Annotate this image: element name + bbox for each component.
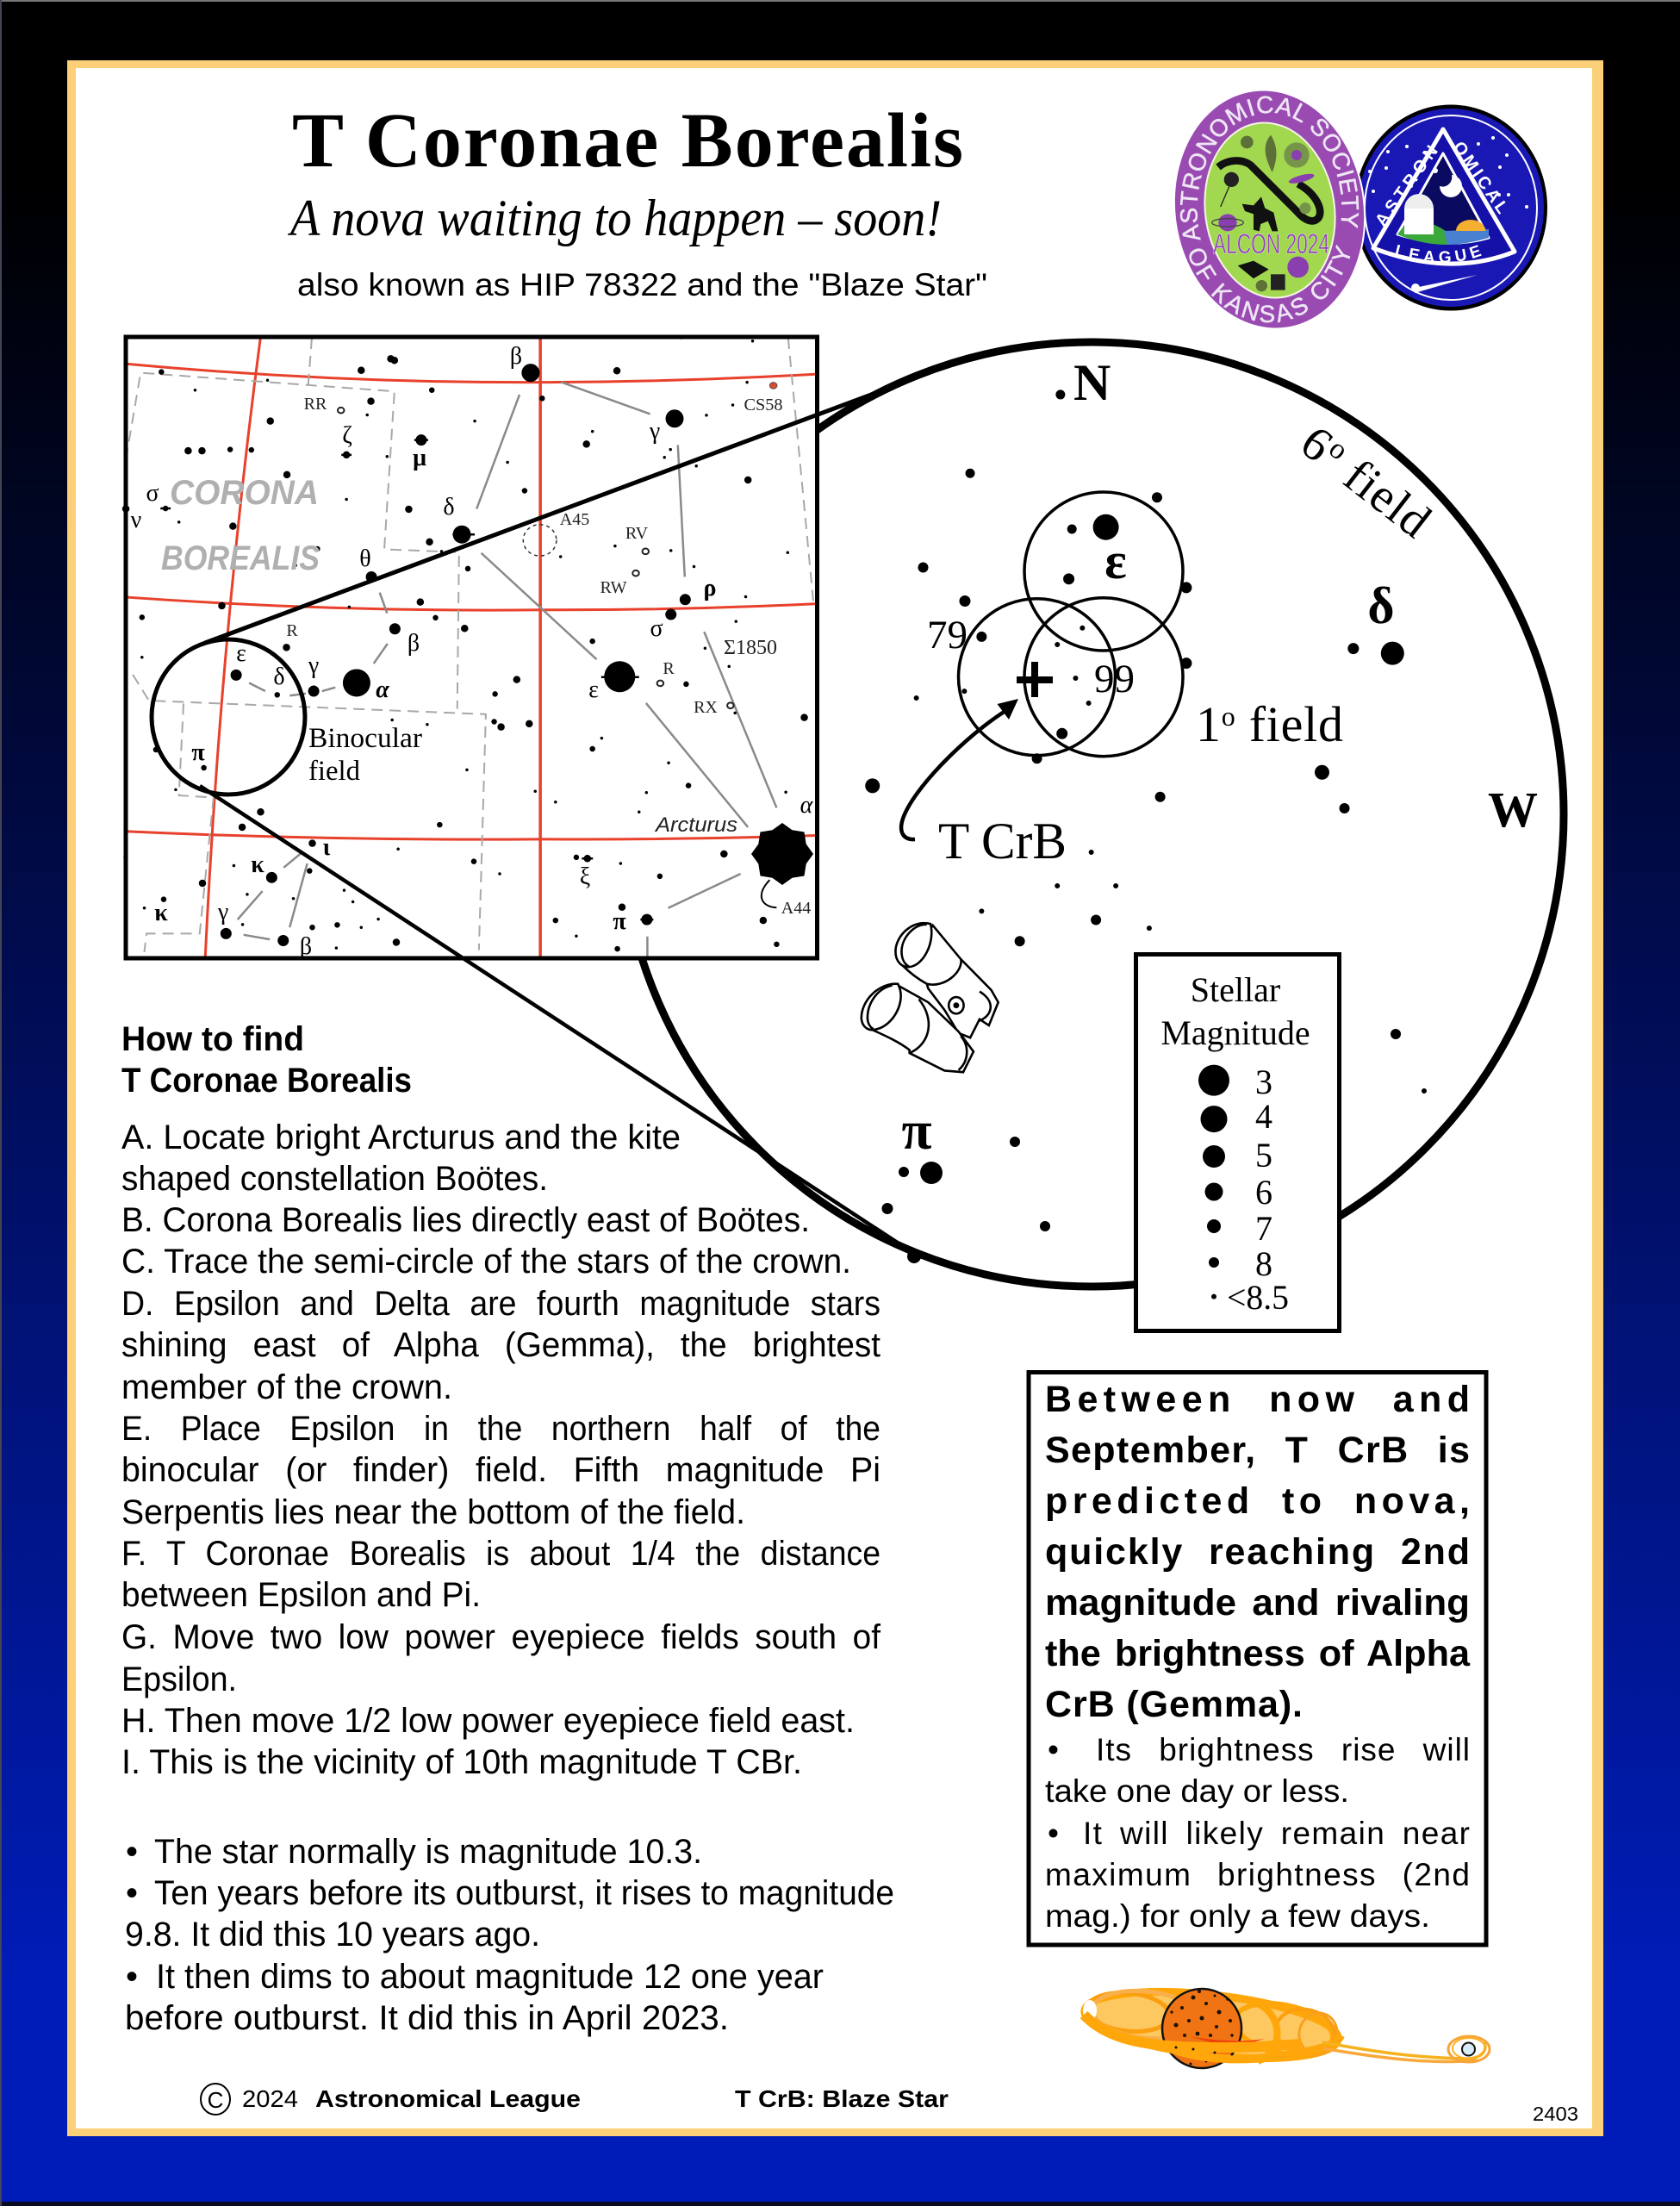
panel: stellar magnitude legend: Magnitude: [1160, 1013, 1310, 1052]
callout: prediction: predicted to nova,: [1045, 1480, 1470, 1522]
subtitle: A nova waiting to happen – soon!: [287, 190, 942, 246]
map labels: ν: [131, 507, 141, 533]
map labels: ρ: [704, 575, 716, 601]
logo: ALCON 2024: OF KANSAS CITY: [1189, 245, 1351, 322]
text block: finding instructions: B. Corona Borealis lies directly east of Boötes.: [121, 1201, 810, 1239]
field labels: T CrB: [938, 813, 1067, 869]
title: T Coronae Borealis: [292, 98, 963, 184]
logo: Astronomical League: OMICAL: [1456, 142, 1506, 215]
footer: copyright: Astronomical League: [315, 2085, 581, 2112]
field labels: W: [1488, 782, 1538, 838]
text block: finding instructions: member of the crown.: [121, 1368, 452, 1406]
constellation figures: [238, 382, 776, 957]
footer: issue number: 2403: [1533, 2103, 1578, 2125]
icon: binoculars: [862, 923, 999, 1072]
callout: prediction: maximum brightness (2nd: [1045, 1857, 1470, 1892]
map labels: RR: [304, 395, 327, 414]
logo: Astronomical League: [1360, 105, 1547, 310]
text block: brightness history: 9.8. It did this 10 years ago.: [125, 1916, 540, 1954]
callout: prediction: mag.) for only a few days.: [1045, 1898, 1430, 1934]
text block: finding instructions: E. Place Epsilon in the northern half of the: [121, 1410, 880, 1448]
text block: finding instructions: A. Locate bright Arcturus and the kite: [121, 1119, 681, 1156]
map labels: BOREALIS: [161, 539, 320, 577]
callout: prediction: magnitude and rivaling: [1045, 1582, 1470, 1623]
map labels: R: [286, 621, 298, 640]
panel: stellar magnitude legend: 8: [1255, 1244, 1272, 1283]
alternate names: also known as HIP 78322 and the "Blaze Star": [297, 267, 987, 302]
panel: stellar magnitude legend: Stellar: [1191, 970, 1280, 1009]
map labels: β: [408, 630, 420, 657]
map labels: A44: [781, 899, 811, 918]
footer: copyright: 2024: [242, 2085, 298, 2112]
field labels: δ: [1367, 577, 1395, 634]
field labels: 99: [1094, 657, 1135, 701]
panel: stellar magnitude legend: [1136, 955, 1339, 1330]
text block: finding instructions: [121, 1119, 881, 1781]
text block: brightness history: •: [126, 1833, 138, 1871]
field labels: ε: [1104, 533, 1127, 589]
map labels: CORONA: [170, 474, 319, 512]
one degree field circles: [958, 492, 1183, 757]
panel: stellar magnitude legend: 7: [1255, 1209, 1272, 1248]
map labels: δ: [273, 664, 285, 690]
map labels: R: [663, 659, 675, 678]
map labels: [131, 343, 814, 960]
map labels: γ: [308, 652, 319, 679]
text block: brightness history: Ten years before its outburst, it rises to magnitude: [154, 1874, 894, 1912]
star chart panel: [125, 337, 818, 960]
text block: brightness history: [125, 1833, 894, 2037]
map labels: Binocular: [308, 723, 422, 754]
map labels: γ: [217, 899, 228, 925]
map labels: ζ: [342, 422, 352, 449]
field labels: π: [901, 1100, 932, 1161]
map labels: ε: [236, 640, 246, 667]
map labels: ι: [323, 834, 331, 861]
logo: ALCON 2024: ASTRONOMICAL SOCIETY: [1180, 96, 1360, 240]
map labels: CS58: [744, 396, 782, 414]
map labels: A45: [560, 510, 589, 529]
text block: brightness history: •: [126, 1874, 138, 1912]
text block: brightness history: before outburst. It did this in April 2023.: [125, 1999, 729, 2037]
logo: Astronomical League: ASTRON: [1377, 145, 1438, 227]
callout: prediction: take one day or less.: [1045, 1773, 1349, 1809]
map labels: μ: [413, 445, 426, 471]
logo: ALCON 2024: [1175, 91, 1366, 327]
footer: copyright: [201, 2084, 581, 2115]
field labels: 1: [1196, 696, 1221, 752]
map labels: RV: [625, 524, 649, 543]
callout: prediction: [1029, 1372, 1486, 1945]
text block: finding instructions: G. Move two low power eyepiece fields south of: [121, 1618, 881, 1656]
text block: finding instructions: D. Epsilon and Delta are fourth magnitude stars: [121, 1285, 880, 1323]
callout: prediction: •: [1048, 1732, 1059, 1767]
panel: stellar magnitude legend: 5: [1255, 1136, 1272, 1175]
map labels: π: [613, 908, 626, 935]
text block: finding instructions: I. This is the vicinity of 10th magnitude T CBr.: [121, 1743, 802, 1781]
callout: prediction: •: [1048, 1816, 1059, 1851]
map labels: RX: [694, 698, 718, 717]
text block: finding instructions: shaped constellation Boötes.: [121, 1160, 548, 1198]
field labels: o: [1322, 433, 1354, 467]
field labels: 79: [927, 613, 968, 657]
footer: sheet title: T CrB: Blaze Star: [735, 2085, 949, 2112]
panel: stellar magnitude legend: 4: [1255, 1097, 1272, 1136]
logo: Astronomical League: LEAGUE: [1396, 245, 1482, 262]
map labels: θ: [359, 545, 371, 572]
callout: prediction: It will likely remain near: [1083, 1816, 1470, 1851]
map labels: κ: [251, 851, 264, 878]
text block: finding instructions: Epsilon.: [121, 1661, 237, 1698]
callout: prediction: the brightness of Alpha: [1045, 1633, 1471, 1674]
field labels: 6: [1291, 415, 1342, 472]
field labels: field: [1323, 441, 1440, 548]
text block: finding instructions: between Epsilon and Pi.: [121, 1576, 481, 1614]
map labels: field: [308, 756, 360, 787]
map labels: ξ: [580, 863, 590, 890]
map labels: β: [300, 933, 312, 960]
six degree star field: [873, 395, 1427, 1263]
panel: stellar magnitude legend: 6: [1255, 1173, 1272, 1212]
callout: prediction: Between now and: [1045, 1379, 1470, 1420]
map labels: σ: [146, 480, 159, 507]
text block: brightness history: •: [126, 1958, 138, 1996]
map labels: κ: [154, 900, 168, 926]
callout: prediction: September, T CrB is: [1045, 1430, 1470, 1471]
field labels: [901, 354, 1538, 1161]
heading: how to find: How to find: [121, 1020, 304, 1058]
map labels: α: [800, 792, 814, 819]
map labels: RW: [600, 578, 627, 597]
callout: prediction: Its brightness rise will: [1096, 1732, 1470, 1767]
callout: prediction: quickly reaching 2nd: [1045, 1531, 1470, 1573]
field labels: N: [1073, 354, 1111, 411]
map labels: β: [510, 343, 522, 370]
map labels: α: [376, 676, 389, 703]
footer: copyright: C: [208, 2087, 223, 2113]
T CrB position marker: [1017, 662, 1053, 697]
map labels: π: [191, 739, 205, 766]
map labels: Σ1850: [724, 637, 777, 659]
text block: finding instructions: C. Trace the semi-circle of the stars of the crown.: [121, 1243, 851, 1281]
text block: brightness history: The star normally is magnitude 10.3.: [154, 1833, 702, 1871]
text block: finding instructions: binocular (or finder) field. Fifth magnitude Pi: [121, 1451, 880, 1489]
callout: prediction: CrB (Gemma).: [1045, 1684, 1303, 1725]
six degree field circle: [619, 342, 1564, 1287]
text block: brightness history: It then dims to about magnitude 12 one year: [156, 1958, 824, 1996]
panel: stellar magnitude legend: <8.5: [1227, 1278, 1289, 1317]
field labels: o: [1222, 701, 1235, 732]
map labels: γ: [649, 418, 660, 445]
illustration: nova binary system: [1081, 1981, 1490, 2069]
open and variable stars: [338, 408, 734, 708]
field labels: field: [1235, 696, 1343, 752]
map labels: Arcturus: [654, 813, 737, 837]
text block: finding instructions: shining east of Alpha (Gemma), the brightest: [121, 1326, 880, 1364]
text block: finding instructions: Serpentis lies near the bottom of the field.: [121, 1493, 745, 1531]
map labels: δ: [443, 494, 455, 520]
constellation boundaries: [126, 338, 813, 952]
Arcturus: [751, 823, 813, 885]
map labels: ε: [588, 676, 599, 703]
binocular field circle with cone lines: [152, 389, 916, 1255]
arrow to T CrB: [901, 699, 1018, 839]
panel: stellar magnitude legend: 3: [1255, 1062, 1272, 1101]
stars: [125, 338, 787, 948]
heading: how to find: T Coronae Borealis: [121, 1062, 412, 1100]
heading: how to find: [121, 1020, 412, 1100]
text block: finding instructions: F. T Coronae Borealis is about 1/4 the distance: [121, 1535, 880, 1573]
coordinate grid: [125, 337, 818, 957]
text block: finding instructions: H. Then move 1/2 low power eyepiece field east.: [121, 1702, 855, 1740]
map labels: σ: [650, 615, 663, 642]
logo: ALCON 2024: ALCON 2024: [1213, 228, 1329, 259]
